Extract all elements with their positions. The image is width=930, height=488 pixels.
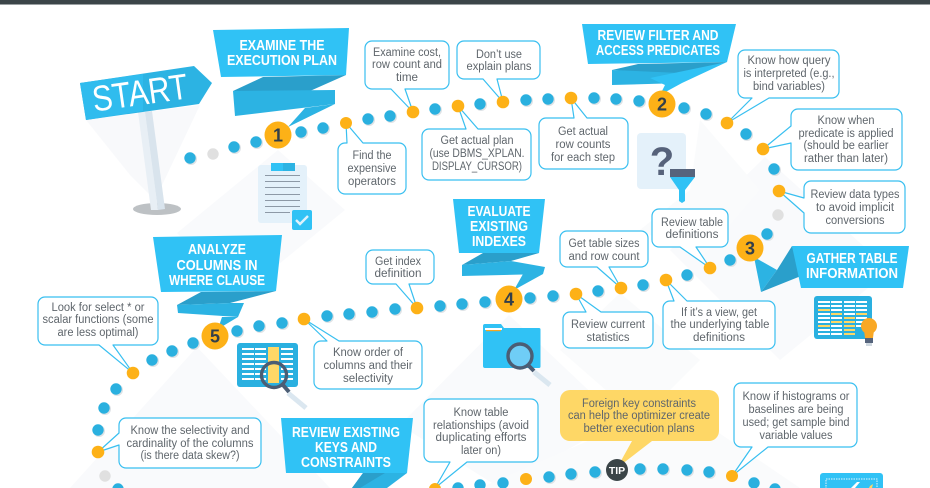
callout: tip foreign key constraints: can help the optimizer create <box>568 410 710 422</box>
dotted roadmap path <box>92 92 785 488</box>
ribbon: review existing keys and constraints: CONSTRAINTS <box>301 455 391 471</box>
callout: know order of columns: selectivity <box>343 373 393 385</box>
icon: question mark and funnel <box>637 133 695 203</box>
callout: look for select *: Look for select * or <box>52 302 145 314</box>
callout: know if histograms: Know if histograms or <box>742 391 850 403</box>
callout: know if histograms: variable values <box>760 430 833 442</box>
ribbon: evaluate existing indexes <box>453 199 545 290</box>
icon: pencil on board (cropped) <box>820 473 883 488</box>
callout: know how query is interpreted: is interpreted (e.g., <box>744 68 834 80</box>
callout: know when predicate is applied: rather than later) <box>804 153 888 165</box>
callout: know when predicate is applied: (should be earlier <box>804 140 889 152</box>
callout: don't use explain plans <box>457 41 540 102</box>
callout: get actual plan <box>422 106 531 180</box>
callout: if it's a view: If it’s a view, get <box>681 307 758 319</box>
callout: know order of columns: Know order of <box>333 347 404 359</box>
icon: table with light bulb <box>814 296 877 346</box>
callout: get actual plan: (use DBMS_XPLAN. <box>430 148 524 160</box>
ribbon: review filter and access predicates: REVIEW FILTER AND <box>598 28 718 44</box>
ribbon: gather table information <box>754 246 909 292</box>
ribbon: examine the execution plan: EXAMINE THE <box>240 38 325 54</box>
ribbon: review existing keys and constraints <box>281 418 413 488</box>
icon: table with magnifier <box>237 343 306 408</box>
sign board: START <box>90 66 190 119</box>
ribbon: evaluate existing indexes: EXISTING <box>470 219 528 235</box>
callout: review table definitions: definitions <box>666 229 719 241</box>
callout: get actual plan: Get actual plan <box>440 135 514 147</box>
callout: look for select * <box>38 297 158 373</box>
callout: review data types: to avoid implicit <box>816 202 895 214</box>
badge: step 2: 2 <box>657 94 667 114</box>
callout: look for select *: scalar functions (some <box>42 314 154 326</box>
callout: know table relationships <box>424 399 538 488</box>
callout: if it's a view: definitions <box>693 332 745 344</box>
callout: know the selectivity and cardinality: Know the selectivity and <box>130 425 250 437</box>
badge: step 1: 1 <box>273 126 283 146</box>
ribbon: review filter and access predicates <box>582 24 736 95</box>
callout: know how query is interpreted: bind variables) <box>753 81 825 93</box>
callout: find the expensive operators: expensive <box>348 163 396 175</box>
callout: look for select *: are less optimal) <box>58 327 139 339</box>
callout: review data types: conversions <box>826 215 885 227</box>
callout: review data types <box>779 181 905 233</box>
badge: tip <box>606 459 628 481</box>
callout: know table relationships: Know table <box>454 407 508 419</box>
callout: get actual row counts: Get actual <box>558 126 608 138</box>
ribbon: gather table information: INFORMATION <box>806 266 898 282</box>
callout: find the expensive operators: operators <box>348 176 396 188</box>
callout: tip foreign key constraints: Foreign key constraints <box>582 398 696 410</box>
callout: examine cost <box>365 41 449 112</box>
callout: find the expensive operators <box>338 123 406 194</box>
callout: get index definition: definition <box>374 268 422 280</box>
callout: get index definition: Get index <box>375 256 421 268</box>
badge: step 5: 5 <box>210 326 220 346</box>
ribbon: analyze columns in where clause: COLUMNS IN <box>176 258 258 274</box>
ribbon: examine the execution plan <box>213 28 349 127</box>
ribbon: review existing keys and constraints: REVIEW EXISTING <box>292 425 400 441</box>
callout: know when predicate is applied: Know when <box>818 115 874 127</box>
badge: tip: TIP <box>609 465 625 477</box>
callout: don't use explain plans: Don’t use <box>476 49 522 61</box>
callout: if it's a view: the underlying table <box>670 319 770 331</box>
callout: know order of columns: columns and their <box>324 360 413 372</box>
callout: know when predicate is applied: predicate is applied <box>798 128 894 140</box>
callout: get actual plan: DISPLAY_CURSOR) <box>432 161 522 173</box>
callout: know if histograms: used; get sample bind <box>742 417 850 429</box>
badge: step 1 <box>264 122 292 148</box>
badge: step 4: 4 <box>504 290 514 310</box>
callout: know table relationships: later on) <box>461 445 501 457</box>
callout: know how query is interpreted: Know how query <box>748 55 831 67</box>
badge: step 5 <box>202 322 228 350</box>
callout: know the selectivity and cardinality: (is there data skew?) <box>140 450 240 462</box>
callout: get table sizes and row count <box>560 231 648 288</box>
icon: clipboard with check <box>258 163 312 230</box>
callout: know when predicate is applied <box>763 109 902 170</box>
callout: if it's a view <box>663 280 775 349</box>
callout: tip foreign key constraints: better execution plans <box>584 423 695 435</box>
ribbon: review existing keys and constraints: KEYS AND <box>315 440 377 456</box>
callout: review current statistics: statistics <box>586 332 630 344</box>
callout: know if histograms: baselines are being <box>748 404 844 416</box>
callout: know the selectivity and cardinality: cardinality of the columns <box>126 438 254 450</box>
callout: review data types: Review data types <box>810 189 900 201</box>
icon: folder with magnifier <box>483 324 550 385</box>
icon: question mark and funnel: ? <box>650 140 674 184</box>
callout: know how query is interpreted <box>727 50 839 123</box>
ribbon: review filter and access predicates: ACCESS PREDICATES <box>596 43 720 59</box>
signpost: START <box>80 66 212 215</box>
callout: review table definitions <box>652 209 728 268</box>
sign post <box>133 111 181 215</box>
badge: step 4 <box>496 286 522 312</box>
callout: examine cost: time <box>396 72 418 84</box>
callout: review current statistics <box>563 294 653 348</box>
callout: examine cost: Examine cost, <box>373 47 441 59</box>
callout: get table sizes and row count: and row count <box>568 251 640 263</box>
callout: know order of columns <box>304 319 422 389</box>
ribbon: analyze columns in where clause: WHERE CLAUSE <box>169 273 265 289</box>
ribbon: evaluate existing indexes: EVALUATE <box>468 204 531 220</box>
callout: know table relationships: duplicating efforts <box>436 432 527 444</box>
callout: find the expensive operators: Find the <box>352 150 392 162</box>
callout: get actual row counts: row counts <box>556 139 611 151</box>
callout: know the selectivity and cardinality <box>98 418 261 468</box>
callout: get actual row counts <box>539 98 628 169</box>
ribbon: analyze columns in where clause: ANALYZE <box>188 242 246 258</box>
callout: don't use explain plans: explain plans <box>466 61 532 73</box>
callout: examine cost: row count and <box>372 59 442 71</box>
ribbon: evaluate existing indexes: INDEXES <box>472 234 526 250</box>
callout: get table sizes and row count: Get table sizes <box>568 238 640 250</box>
callout: review current statistics: Review current <box>571 319 646 331</box>
ribbon: gather table information: GATHER TABLE <box>806 251 898 267</box>
ribbon: examine the execution plan: EXECUTION PLAN <box>227 53 337 69</box>
callout: review table definitions: Review table <box>661 217 723 229</box>
callout: know table relationships: relationships (avoid <box>433 420 529 432</box>
badge: step 2 <box>648 90 676 118</box>
ribbon: analyze columns in where clause <box>153 235 282 329</box>
callout: get actual row counts: for each step <box>551 152 615 164</box>
callout: tip foreign key constraints <box>560 390 719 468</box>
callout: know if histograms <box>732 383 857 476</box>
badge: step 3 <box>736 234 764 262</box>
badge: step 3: 3 <box>745 238 755 258</box>
callout: get index definition <box>366 250 434 308</box>
